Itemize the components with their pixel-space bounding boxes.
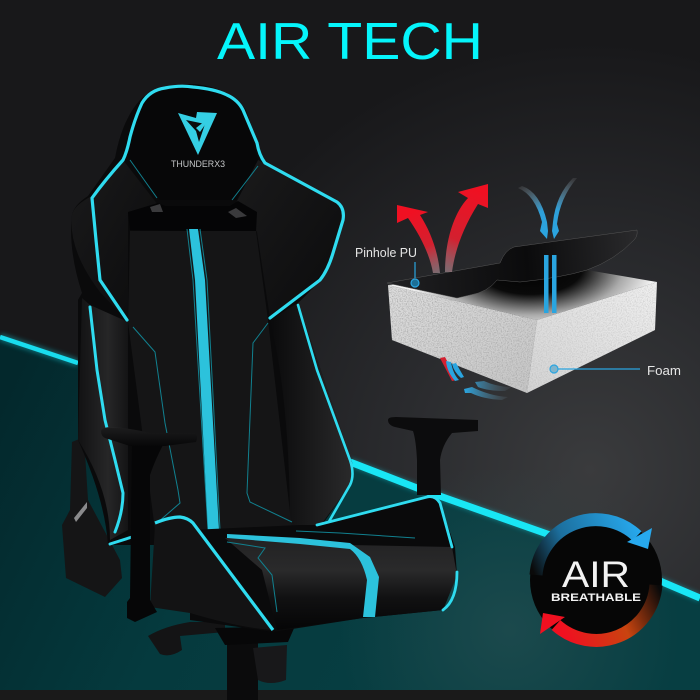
- floor edge glow line: [0, 337, 700, 598]
- chair pole and height lever: [148, 622, 295, 700]
- headrest gap band: [128, 201, 257, 232]
- foam and PU layer diagram: [355, 178, 681, 400]
- red arc arrow: [556, 585, 656, 640]
- foam right face: [527, 282, 657, 393]
- left arm pad: [101, 427, 197, 446]
- backrest shell: [71, 84, 353, 545]
- logo and brand mark: THUNDERX3: [171, 159, 225, 170]
- left armrest: [101, 427, 197, 622]
- badge disc: [530, 514, 662, 646]
- logo and brand mark: [171, 112, 225, 170]
- red arrow left: [397, 205, 440, 273]
- blue arrow right: [552, 178, 577, 239]
- left lower bolster: [78, 298, 128, 540]
- thin back seams: [130, 160, 292, 530]
- blue arrow left: [518, 186, 548, 239]
- gaming chair: [62, 84, 478, 700]
- foam left face: [388, 285, 537, 393]
- headrest: [127, 87, 258, 200]
- blue vertical air lines: [544, 255, 556, 313]
- left arm column: [127, 445, 163, 622]
- AIR breathable badge: BREATHABLE: [551, 592, 641, 604]
- center back panel: [128, 231, 292, 530]
- blue arc arrow: [536, 520, 637, 575]
- recline mechanism: [62, 437, 122, 597]
- label: Pinhole PU: [355, 245, 419, 287]
- cyan back stripe: [189, 229, 219, 530]
- back piping: [90, 86, 352, 544]
- red arrow right: [445, 184, 488, 272]
- teal floor: [0, 337, 700, 700]
- foam top face: [388, 270, 657, 320]
- right armrest: [388, 417, 478, 495]
- title: AIR TECH: [217, 13, 483, 71]
- airflow arrows under foam: [440, 357, 512, 400]
- seat cushion: [190, 497, 457, 632]
- label: Foam: [550, 363, 681, 378]
- label: Foam: Foam: [647, 363, 681, 378]
- left seat bolster: [150, 517, 273, 630]
- right wing: [236, 160, 344, 318]
- right lower bolster: [270, 303, 353, 530]
- pinhole PU sheet: [387, 230, 637, 298]
- seat piping: [317, 497, 457, 610]
- label: Pinhole PU: Pinhole PU: [355, 245, 417, 260]
- AIR breathable badge: [530, 514, 662, 646]
- left wing: [72, 160, 158, 322]
- badge text: AIR: [562, 554, 630, 595]
